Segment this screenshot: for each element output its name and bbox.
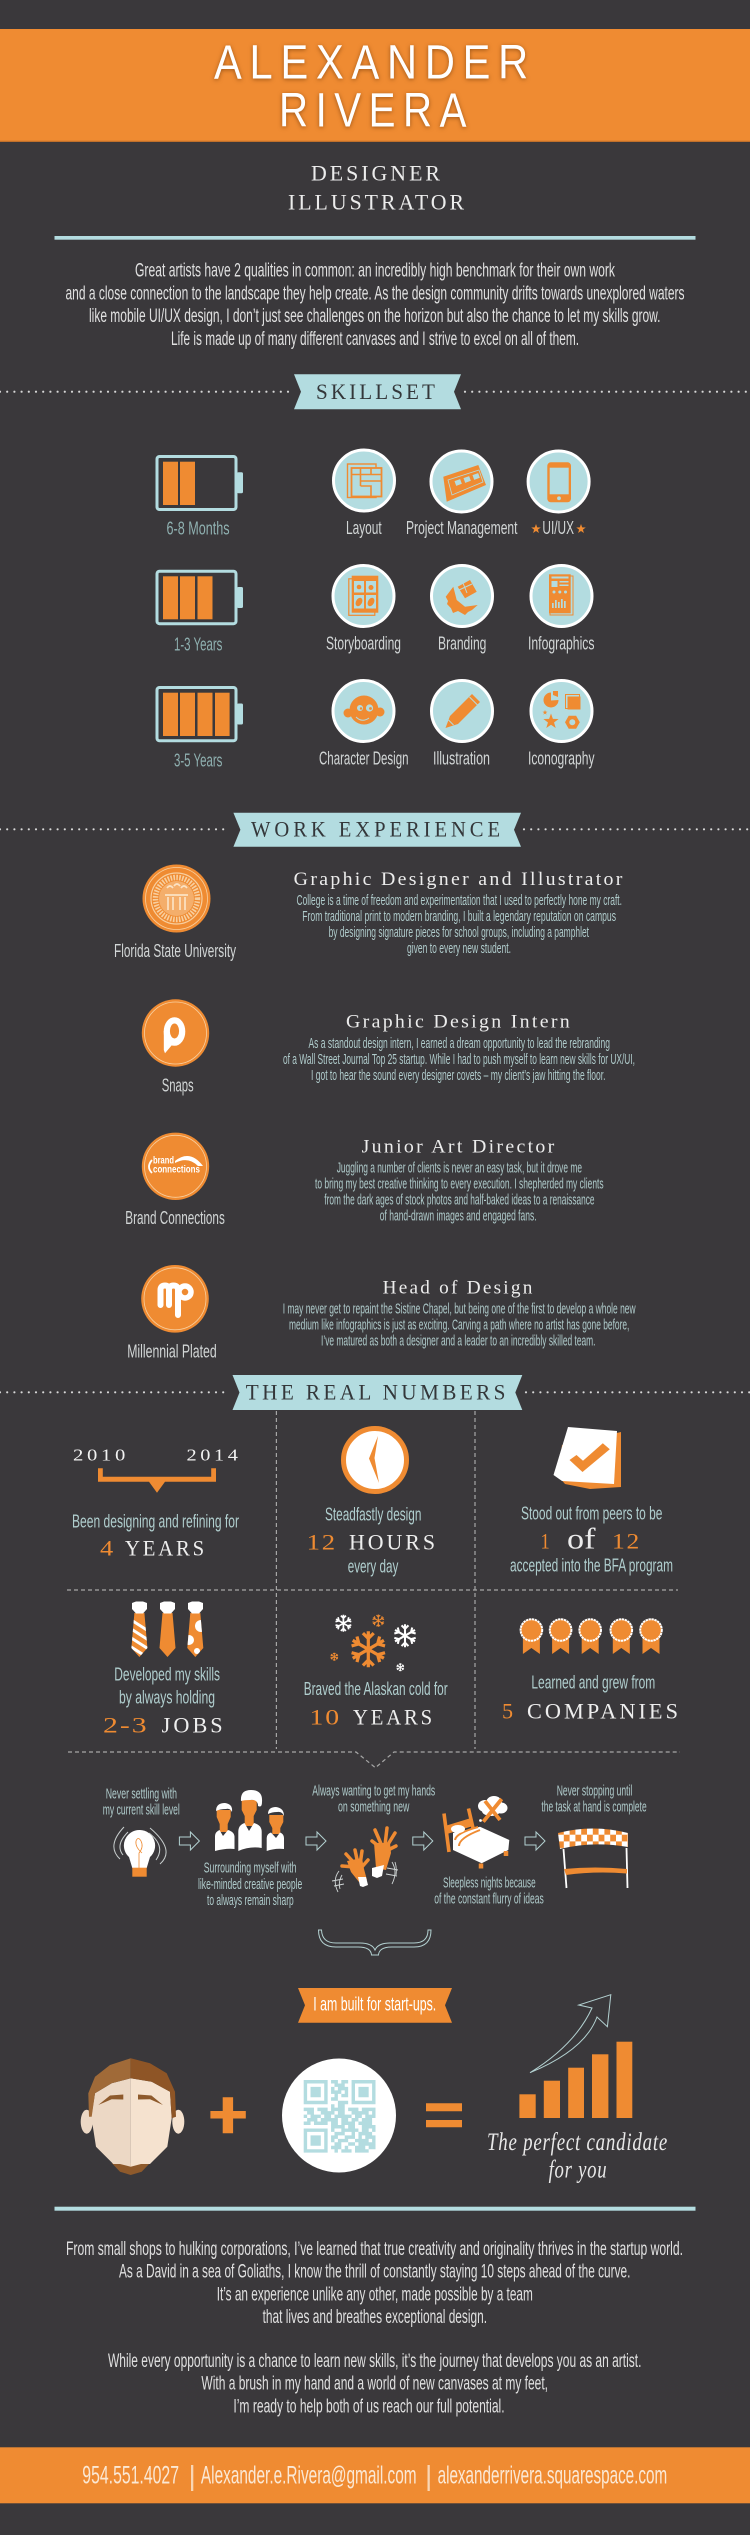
caption: the perfect candidate: for you — [549, 2156, 607, 2183]
stat: years designing — [72, 1446, 242, 1560]
arrow — [179, 1832, 199, 1850]
stat: companies: Learned and grew from — [531, 1671, 655, 1692]
logo: brand connections — [142, 1133, 209, 1200]
stat: companies: COMPANIES — [527, 1698, 681, 1723]
step: never stopping: Never stopping until — [557, 1782, 632, 1799]
stat: jobs: by always holding — [119, 1686, 215, 1707]
role: head of design: Head of Design — [383, 1277, 535, 1298]
stat: jobs — [103, 1602, 226, 1738]
skill: layout — [334, 450, 394, 538]
step: never settling — [103, 1785, 180, 1877]
stat: 1 of 12: Stood out from peers to be — [521, 1502, 662, 1523]
stat: companies: 5 — [502, 1698, 515, 1723]
closing paragraphs: It’s an experience unlike any other, made possible by a team — [217, 2284, 533, 2305]
step: always wanting: Always wanting to get my hands — [312, 1782, 435, 1799]
footer band with contact details: | — [425, 2460, 432, 2491]
role: graphic design intern — [283, 1011, 635, 1084]
footer band with contact details: Alexander.e.Rivera@gmail.com — [201, 2461, 417, 2489]
arrow — [525, 1832, 545, 1850]
role: junior art director — [315, 1136, 604, 1225]
label: millennial plated: Millennial Plated — [127, 1340, 217, 1361]
arrow — [413, 1832, 433, 1850]
stat: hours per day: 12 — [307, 1529, 337, 1554]
stat: years designing: 2014 — [186, 1446, 242, 1465]
footer band with contact details — [0, 2447, 750, 2503]
role: junior art director: Junior Art Director — [362, 1136, 557, 1157]
battery: 6-8 months: 6-8 Months — [166, 517, 230, 538]
step: surrounding myself — [198, 1790, 302, 1909]
step: never settling: my current skill level — [103, 1801, 180, 1818]
role: graphic designer and illustrator — [294, 869, 625, 957]
caption: the perfect candidate — [487, 2129, 668, 2183]
logo: brand connections: connections — [153, 1163, 200, 1175]
step: surrounding myself: like-minded creative people — [198, 1876, 302, 1893]
skill: character design — [319, 680, 408, 769]
footer band with contact details: 954.551.4027 — [82, 2461, 179, 2489]
skill: project management — [406, 451, 518, 538]
title: name — [214, 36, 536, 138]
logo: florida state university — [142, 864, 210, 932]
plus sign — [210, 2097, 246, 2133]
intro paragraph — [66, 261, 684, 350]
section banner: skillset: SKILLSET — [316, 379, 438, 404]
title: name: RIVERA — [279, 85, 474, 138]
banner: built for start-ups: I am built for start-ups. — [313, 1995, 436, 2016]
role: graphic designer and illustrator: Graphic Designer and Illustrator — [294, 869, 625, 890]
equals sign — [426, 2103, 462, 2127]
step: never stopping: the task at hand is complete — [541, 1799, 647, 1816]
battery: 1-3 years: 1-3 Years — [174, 633, 222, 654]
portrait: face — [81, 2058, 184, 2175]
skill: iconography: Iconography — [528, 748, 595, 769]
role: graphic designer and illustrator: given to every new student. — [407, 940, 511, 957]
stat: alaskan cold: 10 — [310, 1704, 341, 1729]
label: brand connections: Brand Connections — [125, 1207, 225, 1228]
section banner: work experience: WORK EXPERIENCE — [251, 817, 504, 842]
stat: 1 of 12: 12 — [612, 1528, 641, 1553]
closing paragraphs: that lives and breathes exceptional design. — [263, 2307, 487, 2328]
stat: 1 of 12: 1 — [540, 1528, 551, 1553]
stat: hours per day: every day — [348, 1556, 399, 1577]
closing paragraphs — [66, 2239, 683, 2417]
skill: branding — [432, 566, 492, 654]
arrow — [306, 1832, 326, 1850]
stat: alaskan cold: YEARS — [353, 1704, 435, 1729]
label: florida state university: Florida State University — [114, 940, 236, 961]
battery: 3-5 years — [157, 688, 243, 771]
banner: built for start-ups — [298, 1988, 452, 2023]
closing paragraphs: With a brush in my hand and a world of new canvases at my feet, — [201, 2374, 548, 2395]
battery: 1-3 years — [157, 571, 243, 654]
skill: branding: Branding — [438, 633, 486, 654]
skill: character design: Character Design — [319, 748, 408, 769]
stat: jobs: Developed my skills — [114, 1664, 220, 1685]
stat: jobs: JOBS — [162, 1713, 226, 1738]
skill: infographics: Infographics — [528, 633, 594, 654]
section banner: the real numbers — [0, 1375, 750, 1410]
stat: hours per day — [307, 1428, 438, 1577]
step: always wanting — [312, 1782, 435, 1892]
skill: infographics — [528, 566, 594, 654]
step: always wanting: on something new — [338, 1799, 409, 1816]
skill: layout: Layout — [346, 517, 382, 538]
caption: the perfect candidate: The perfect candidate — [487, 2129, 668, 2156]
stat: companies — [502, 1619, 681, 1723]
skill: ui/ux: UI/UX — [542, 517, 574, 538]
stat: alaskan cold — [304, 1614, 448, 1729]
section banner: skillset — [0, 374, 750, 409]
skill: storyboarding: Storyboarding — [326, 633, 401, 654]
logo: millennial plated — [141, 1265, 209, 1333]
step: never stopping — [541, 1782, 647, 1888]
skill: illustration — [432, 680, 492, 769]
label: snaps: Snaps — [162, 1075, 194, 1096]
footer band with contact details: | — [188, 2460, 196, 2491]
skill: ui/ux — [528, 451, 589, 538]
skill: iconography — [528, 680, 595, 769]
section banner: work experience — [0, 813, 750, 847]
skill: project management: Project Management — [406, 517, 518, 538]
logo: snaps — [142, 999, 209, 1067]
stat: alaskan cold: Braved the Alaskan cold for — [304, 1678, 448, 1699]
section banner: the real numbers: THE REAL NUMBERS — [246, 1379, 509, 1404]
header band — [0, 29, 750, 142]
step: surrounding myself: Surrounding myself with — [204, 1860, 296, 1877]
role: head of design — [283, 1277, 636, 1349]
step: sleepless nights — [434, 1796, 544, 1907]
brace — [318, 1930, 431, 1955]
stat: jobs: 2-3 — [103, 1713, 149, 1738]
closing paragraphs: I’m ready to help both of us reach our full potential. — [233, 2396, 505, 2417]
role: graphic design intern: Graphic Design Intern — [346, 1011, 572, 1032]
stat: years designing: 2010 — [73, 1446, 129, 1465]
battery: 3-5 years: 3-5 Years — [174, 750, 222, 771]
step: never settling: Never settling with — [106, 1785, 177, 1802]
growth chart — [519, 1995, 632, 2118]
step: sleepless nights: of the constant flurry of ideas — [434, 1890, 544, 1907]
step: surrounding myself: to always remain sharp — [207, 1892, 294, 1909]
qr code — [282, 2058, 396, 2172]
role: junior art director: of hand-drawn images and engaged fans. — [380, 1208, 537, 1225]
battery: 6-8 months — [157, 456, 243, 538]
stat: years designing: 4 — [100, 1535, 115, 1560]
stat: years designing: Been designing and refining for — [72, 1510, 239, 1531]
skill: illustration: Illustration — [433, 748, 490, 769]
subtitle: roles: DESIGNER — [311, 161, 443, 186]
skill: storyboarding — [326, 566, 401, 654]
stat: hours per day: Steadfastly design — [325, 1504, 421, 1525]
stat: hours per day: HOURS — [349, 1529, 438, 1554]
logo: brand connections: brand — [153, 1156, 174, 1166]
subtitle: roles: ILLUSTRATOR — [288, 189, 467, 214]
subtitle: roles — [288, 161, 467, 214]
stat: 1 of 12: of — [567, 1522, 596, 1555]
stat: 1 of 12 — [510, 1427, 673, 1576]
title: name: ALEXANDER — [214, 36, 536, 89]
step: sleepless nights: Sleepless nights because — [443, 1874, 536, 1891]
stat: years designing: YEARS — [125, 1535, 207, 1560]
